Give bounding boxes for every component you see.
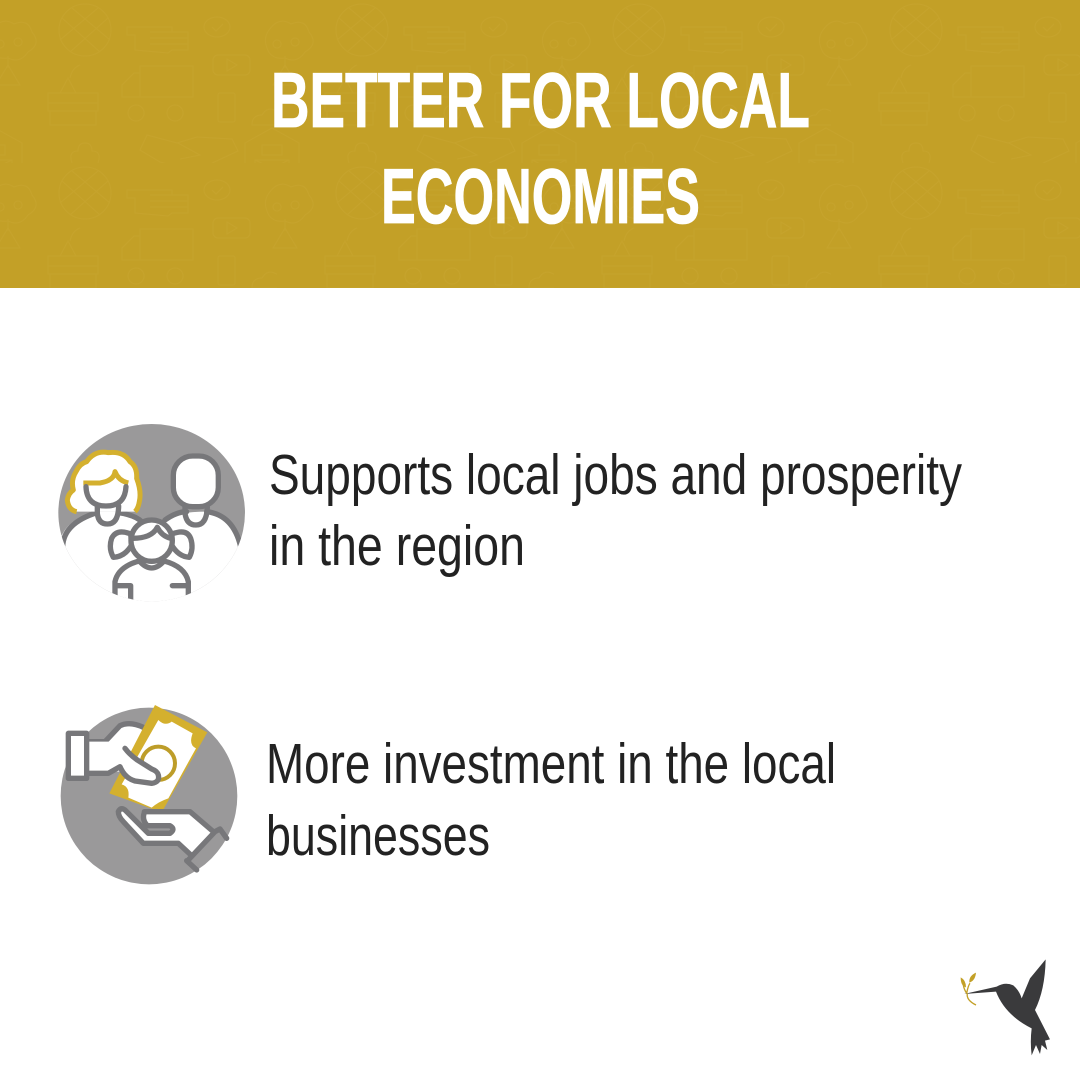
text: investment (266, 732, 836, 868)
icon: money changing hands (61, 705, 237, 884)
logo: hummingbird with sprig (961, 959, 1050, 1055)
title: BETTER FOR LOCAL (271, 56, 810, 144)
text: investment: businesses (266, 804, 490, 868)
text: investment: More investment in the local (266, 732, 836, 796)
header banner (0, 0, 1080, 288)
text: jobs and prosperity: in the region (269, 514, 525, 578)
title (271, 56, 810, 240)
icon: family (58, 424, 245, 617)
text: jobs and prosperity (269, 443, 962, 578)
title: ECONOMIES (381, 152, 700, 240)
